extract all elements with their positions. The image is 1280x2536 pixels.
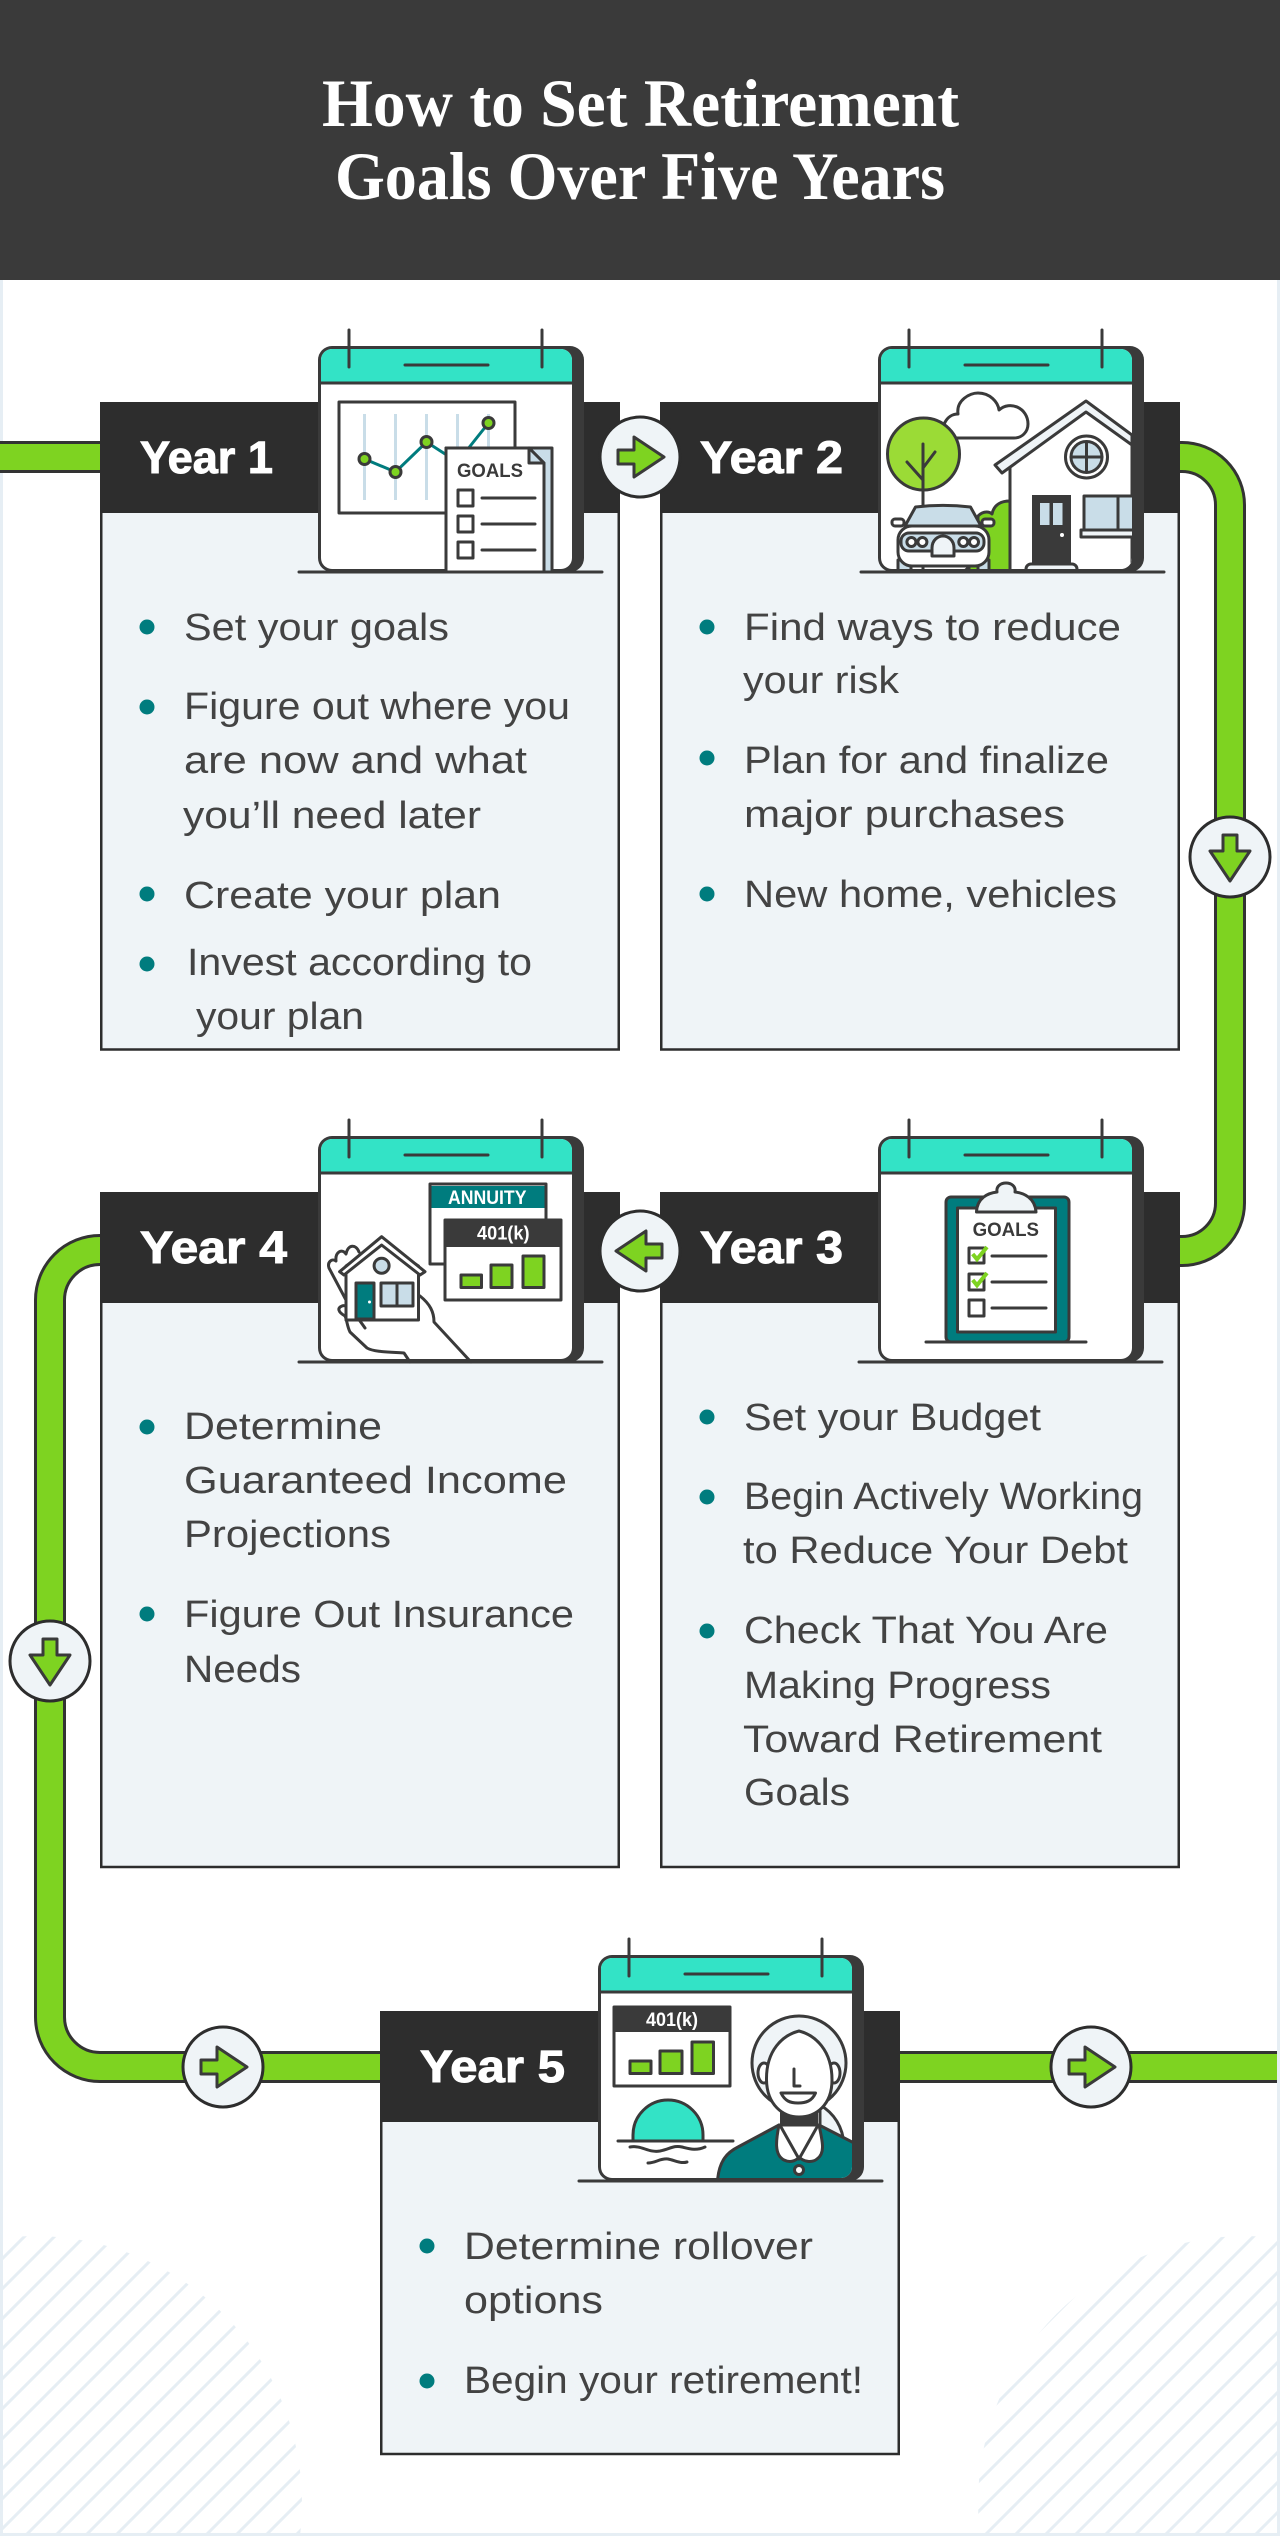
year 5 bullet list: Begin your retirement! [464, 2360, 863, 2402]
panel: year 5 [380, 1939, 900, 2454]
arrow: year 4 to year 5 downward [10, 1621, 90, 1701]
icon: calendar with goals clipboard [859, 1120, 1162, 1362]
panel: year 4 [100, 1120, 620, 1867]
year 1 bullet list: are now and what [184, 740, 527, 782]
year 1 header: Year 1 [140, 432, 273, 483]
year 5 bullet list [420, 2226, 863, 2402]
year 4 bullet list: Needs [184, 1649, 301, 1691]
arrow: year 2 to year 3 [1190, 817, 1270, 897]
year 2 bullet list: your risk [743, 660, 900, 702]
title banner: Goals Over Five Years [335, 138, 945, 214]
year 3 bullet list: to Reduce Your Debt [743, 1530, 1128, 1572]
year 5 bullet list: Determine rollover [464, 2226, 813, 2268]
year 1 bullet list [140, 607, 570, 1038]
year 1 bullet list: your plan [196, 996, 364, 1038]
panel: year 2 [660, 330, 1180, 1050]
green connector path [0, 457, 1277, 2067]
panel: year 3 [660, 1120, 1180, 1867]
icon: calendar with retiree, chart and sunset: 401(k) [646, 2009, 698, 2031]
year 5 header [380, 2011, 900, 2122]
icon: calendar with retiree, chart and sunset [579, 1939, 882, 2181]
year 3 bullet list: Toward Retirement [743, 1719, 1102, 1761]
year 4 bullet list: Determine [184, 1406, 382, 1448]
arrow: year 1 to year 2 [600, 417, 680, 497]
icon: calendar with chart and goals list: GOALS [457, 460, 523, 482]
year 3 bullet list: Set your Budget [744, 1397, 1041, 1439]
year 2 header [660, 402, 1180, 513]
year 5 header: Year 5 [420, 2041, 565, 2092]
year 1 header [100, 402, 620, 513]
arrow: out of year 5 [1051, 2027, 1131, 2107]
year 1 bullet list: Set your goals [184, 607, 449, 649]
title banner: How to Set Retirement [322, 65, 959, 141]
icon: calendar with house, tree and car [861, 330, 1164, 572]
year 1 bullet list: you’ll need later [183, 795, 481, 837]
year 4 bullet list [140, 1406, 574, 1691]
icon: calendar with goals clipboard: GOALS [973, 1219, 1039, 1241]
year 3 bullet list: Begin Actively Working [744, 1476, 1143, 1518]
icon: calendar with house in hand and annuity charts: 401(k) [477, 1222, 530, 1244]
year 3 header [660, 1192, 1180, 1303]
year 1 bullet list: Invest according to [187, 942, 532, 984]
panel: year 1 [100, 330, 620, 1050]
year 5 bullet list: options [464, 2280, 603, 2322]
year 2 bullet list: Find ways to reduce [744, 607, 1121, 649]
year 4 bullet list: Guaranteed Income [184, 1460, 567, 1502]
year 3 header: Year 3 [700, 1222, 843, 1273]
year 3 bullet list [700, 1397, 1143, 1814]
year 4 header [100, 1192, 620, 1303]
arrow: toward year 5 [183, 2027, 263, 2107]
icon: calendar with house in hand and annuity charts [299, 1120, 602, 1362]
icon: calendar with house in hand and annuity charts: ANNUITY [448, 1187, 526, 1209]
year 1 bullet list: Figure out where you [184, 686, 570, 728]
year 2 bullet list: New home, vehicles [744, 874, 1117, 916]
year 3 bullet list: Check That You Are [744, 1610, 1108, 1652]
title banner [0, 0, 1280, 280]
year 4 bullet list: Projections [184, 1514, 391, 1556]
year 4 header: Year 4 [140, 1222, 287, 1273]
year 2 bullet list [700, 607, 1121, 916]
year 1 bullet list: Create your plan [184, 875, 501, 917]
arrow: year 3 to year 4 [600, 1211, 680, 1291]
year 2 bullet list: Plan for and finalize [744, 740, 1109, 782]
year 2 header: Year 2 [700, 432, 843, 483]
year 3 bullet list: Goals [744, 1772, 850, 1814]
year 4 bullet list: Figure Out Insurance [184, 1594, 574, 1636]
icon: calendar with chart and goals list [299, 330, 602, 572]
year 3 bullet list: Making Progress [744, 1665, 1051, 1707]
year 2 bullet list: major purchases [744, 794, 1065, 836]
